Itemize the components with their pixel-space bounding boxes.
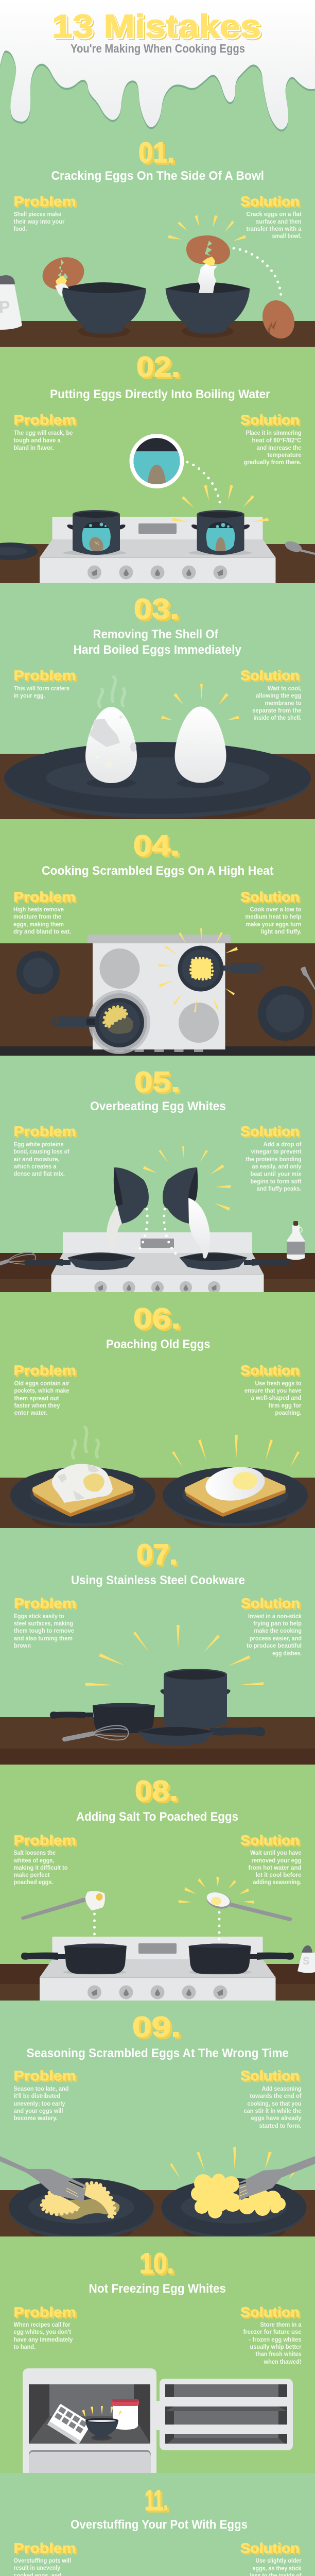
solution text: begins to form soft bbox=[250, 1178, 302, 1185]
solution label: Solution bbox=[240, 2540, 300, 2556]
panel: mistake 10 bbox=[0, 2236, 315, 2473]
solution text: make the cooking bbox=[254, 1627, 302, 1634]
fridge body bbox=[23, 2368, 160, 2473]
problem label: Problem bbox=[15, 1597, 78, 1613]
rays bbox=[143, 1146, 231, 1211]
title: 13 Mistakes bbox=[53, 9, 262, 46]
problem text: The egg will crack, be bbox=[13, 429, 73, 436]
problem text: them spread out bbox=[14, 1395, 59, 1402]
solution text: temperature bbox=[268, 451, 302, 459]
problem label: Problem bbox=[13, 2068, 76, 2083]
number 01: 01. bbox=[138, 136, 174, 168]
solution text: allowing the egg bbox=[256, 692, 302, 699]
panel: mistake 09 bbox=[0, 2001, 315, 2243]
fork right bbox=[239, 2156, 315, 2200]
dripping egg white shadow bbox=[0, 2, 315, 132]
solution text: usually whip better bbox=[250, 2343, 302, 2350]
solution text: to produce beautiful bbox=[247, 1642, 302, 1649]
dotted paths bbox=[136, 1209, 176, 1253]
dotted paths bbox=[95, 1912, 219, 1941]
solution label: Solution bbox=[242, 1834, 301, 1850]
pot right, simmering with whole egg bbox=[189, 510, 252, 555]
solution text: medium heat to help bbox=[245, 913, 302, 920]
problem text: bond, causing loss of bbox=[13, 1148, 69, 1155]
problem text: food. bbox=[13, 225, 27, 232]
salt shaker bbox=[297, 1945, 315, 1973]
number 08: 08. bbox=[135, 1774, 178, 1807]
number 11: 11. bbox=[145, 2484, 168, 2516]
jar bbox=[112, 2399, 139, 2430]
solution text bbox=[247, 1613, 302, 1657]
heading 06: Poaching Old Eggs bbox=[106, 1337, 210, 1351]
number 07: 07. bbox=[136, 1538, 178, 1570]
solution text bbox=[244, 1380, 302, 1416]
solution text: membrane to bbox=[265, 700, 302, 707]
problem text: egg whites, you don't bbox=[13, 2328, 71, 2335]
solution text: inside of the shell. bbox=[253, 714, 302, 721]
subtitle: You're Making When Cooking Eggs bbox=[71, 42, 245, 55]
good eggs bbox=[191, 2174, 286, 2218]
number 09: 09. bbox=[132, 2010, 181, 2043]
panel: header and mistake 01 bbox=[0, 0, 315, 347]
number 03: 03. bbox=[134, 592, 179, 625]
problem text: faster when they bbox=[14, 1402, 60, 1409]
problem text bbox=[13, 906, 71, 935]
counter from above bbox=[0, 943, 315, 1056]
solution text: frying pan to help bbox=[253, 1620, 302, 1627]
heading 11: Overstuffing Your Pot With Eggs bbox=[71, 2518, 248, 2532]
salt shaker: S bbox=[303, 1956, 309, 1967]
problem label: Problem bbox=[15, 1125, 77, 1141]
bowl right with clean crack bbox=[166, 235, 250, 338]
number 04: 04. bbox=[135, 831, 182, 863]
counter bbox=[0, 1717, 315, 1765]
solution text: Cook over a low to bbox=[250, 906, 302, 913]
plate left bbox=[9, 2178, 154, 2243]
number 11: 11. bbox=[147, 2486, 170, 2518]
pot left, boiling with cracked egg bbox=[63, 510, 126, 555]
solution text: Use slightly older bbox=[255, 2557, 302, 2564]
problem text bbox=[13, 2085, 69, 2122]
problem text: have any immediately bbox=[13, 2336, 73, 2343]
problem text: become watery. bbox=[13, 2114, 58, 2122]
rays bbox=[179, 1877, 254, 1904]
counter bbox=[0, 544, 315, 583]
steam bbox=[73, 1427, 98, 1458]
solution text: eggs, as they stick bbox=[252, 2565, 302, 2572]
solution text bbox=[245, 906, 302, 935]
solution text bbox=[246, 1141, 302, 1192]
problem text: making it difficult to bbox=[13, 1864, 68, 1871]
problem text: eggs, making them bbox=[13, 921, 64, 928]
problem text: make perfect bbox=[13, 1871, 50, 1878]
solution text: surface and then bbox=[256, 218, 302, 225]
heading 05: Overbeating Egg Whites bbox=[90, 1099, 226, 1113]
solution text: heat of 80°F/82°C bbox=[252, 437, 302, 444]
solution text: removed your egg bbox=[251, 1857, 302, 1864]
dotted path bbox=[234, 248, 281, 299]
vinegar bottle bbox=[287, 1221, 305, 1260]
solution text: Add seasoning bbox=[261, 2085, 302, 2092]
stove bbox=[40, 517, 276, 588]
problem text: air and moisture, bbox=[13, 1156, 60, 1163]
solution text: gradually from there. bbox=[244, 459, 302, 466]
saucepan bbox=[50, 1703, 155, 1733]
number 07: 07. bbox=[138, 1540, 180, 1572]
steam bbox=[99, 677, 125, 707]
heading 07: Using Stainless Steel Cookware bbox=[71, 1573, 245, 1587]
number 09: 09. bbox=[134, 2012, 183, 2045]
panel: mistake 05 bbox=[0, 1056, 315, 1295]
solution label: Solution bbox=[240, 1833, 300, 1848]
number 06: 06. bbox=[133, 1302, 181, 1334]
counter bbox=[0, 2190, 315, 2236]
problem text bbox=[14, 1380, 69, 1416]
stove bbox=[40, 1937, 276, 2008]
problem label: Problem bbox=[15, 669, 77, 685]
problem text: unevenly; too early bbox=[13, 2100, 65, 2107]
heading 03: Hard Boiled Eggs Immediately bbox=[73, 643, 242, 657]
solution text: light and fluffy. bbox=[261, 928, 302, 935]
whole cracked egg bbox=[257, 296, 300, 343]
number 03: 03. bbox=[136, 595, 181, 627]
solution text: and increase the bbox=[256, 444, 302, 451]
problem text: Overstuffing pots will bbox=[13, 2557, 71, 2564]
solution text: Crack eggs on a flat bbox=[246, 210, 302, 217]
egg with craters bbox=[85, 707, 137, 788]
solution text: eggs have already bbox=[251, 2114, 302, 2122]
problem label: Problem bbox=[15, 2306, 77, 2321]
solution text: from hot water and bbox=[248, 1864, 302, 1871]
problem label: Problem bbox=[13, 194, 76, 209]
problem text: their way into your bbox=[13, 218, 65, 225]
problem text bbox=[13, 685, 69, 699]
solution text: separate from the bbox=[252, 707, 302, 714]
solution text: make your eggs turn bbox=[246, 921, 302, 928]
solution label: Solution bbox=[240, 668, 300, 683]
heading 10: Not Freezing Egg Whites bbox=[89, 2282, 226, 2296]
number 10: 10. bbox=[139, 2247, 174, 2279]
heading 03: Removing The Shell Of bbox=[93, 628, 219, 641]
heading 09: Seasoning Scrambled Eggs At The Wrong Time bbox=[27, 2046, 289, 2060]
solution label: Solution bbox=[242, 1125, 301, 1141]
good pan bbox=[178, 946, 264, 991]
toast left bbox=[32, 1475, 134, 1517]
problem label: Problem bbox=[14, 1596, 76, 1611]
problem text: in your egg. bbox=[13, 692, 45, 699]
panel: mistake 04 bbox=[0, 819, 315, 1056]
problem label: Problem bbox=[13, 412, 76, 428]
rays bbox=[170, 2147, 295, 2179]
solution text: Place it in simmering bbox=[246, 429, 302, 436]
number 10: 10. bbox=[142, 2249, 176, 2281]
problem text: Egg white proteins bbox=[13, 1141, 64, 1148]
solution text: Add a drop of bbox=[264, 1141, 302, 1148]
solution label: Solution bbox=[240, 1363, 300, 1378]
panel: mistake 06 bbox=[0, 1292, 315, 1530]
solution text bbox=[246, 210, 302, 240]
fridge door bbox=[160, 2379, 293, 2450]
ice tray bbox=[47, 2404, 92, 2444]
solution text: towards the end of bbox=[250, 2092, 302, 2099]
solution text: a well-shaped and bbox=[251, 1394, 302, 1401]
number 02: 02. bbox=[136, 350, 180, 383]
fork bbox=[301, 967, 315, 990]
solution text: adding seasoning. bbox=[253, 1878, 302, 1886]
problem text: which creates a bbox=[13, 1163, 57, 1170]
bad poached egg bbox=[52, 1464, 113, 1503]
problem label: Problem bbox=[13, 1124, 76, 1139]
bowl of egg whites bbox=[85, 2418, 118, 2441]
solution text bbox=[244, 2085, 302, 2129]
solution text bbox=[250, 2557, 302, 2576]
smooth egg bbox=[175, 707, 226, 788]
number 01: 01. bbox=[141, 138, 177, 171]
panel: mistake 03 bbox=[0, 583, 315, 822]
problem text: pockets, which make bbox=[14, 1387, 69, 1394]
solution text: process easier, and bbox=[250, 1635, 302, 1642]
rays bbox=[85, 1625, 264, 1686]
stove from above bbox=[87, 935, 231, 1052]
solution text: small bowl. bbox=[272, 232, 302, 240]
panel: mistake 11 bbox=[0, 2473, 315, 2576]
problem text: enter water. bbox=[14, 1409, 47, 1416]
good poached egg bbox=[203, 1463, 267, 1504]
plate right bbox=[163, 1467, 308, 1530]
problem text: moisture from the bbox=[13, 913, 61, 920]
solution text: beat until your mix bbox=[250, 1171, 302, 1178]
burning pan with smoke bbox=[51, 990, 150, 1054]
solution label: Solution bbox=[240, 194, 300, 209]
solution text bbox=[252, 685, 302, 721]
solution text: transfer them with a bbox=[246, 225, 302, 232]
solution text bbox=[244, 429, 302, 466]
frying pan bbox=[138, 1726, 265, 1745]
solution label: Solution bbox=[242, 414, 301, 429]
stove bbox=[51, 1232, 264, 1295]
counter bbox=[0, 321, 315, 347]
pan left bbox=[24, 1252, 135, 1270]
problem label: Problem bbox=[15, 195, 77, 211]
solution text: when thawed! bbox=[264, 2358, 302, 2365]
problem label: Problem bbox=[13, 668, 76, 683]
counter bbox=[0, 754, 315, 819]
number 08: 08. bbox=[137, 1776, 180, 1809]
number 05: 05. bbox=[136, 1067, 182, 1100]
problem label: Problem bbox=[13, 2304, 76, 2320]
bowl left with bad crack bbox=[39, 252, 146, 338]
problem text bbox=[13, 1849, 67, 1886]
problem text: Salt loosens the bbox=[13, 1849, 56, 1856]
plate right bbox=[258, 986, 312, 1041]
title: 13 Mistakes bbox=[54, 10, 263, 47]
spoon with bad egg bbox=[21, 1891, 105, 1920]
solution text: can stir it in while the bbox=[244, 2107, 302, 2114]
saucepan right bbox=[188, 1943, 294, 1975]
problem text: Shell pieces make bbox=[13, 210, 61, 217]
problem label: Problem bbox=[15, 2070, 77, 2085]
number 06: 06. bbox=[135, 1304, 183, 1336]
solution text: - frozen egg whites bbox=[249, 2336, 302, 2343]
whisk bbox=[64, 1725, 129, 1743]
problem text: bland in flavor. bbox=[13, 444, 54, 451]
slotted spoon bbox=[284, 539, 315, 555]
solution text: let it cool before bbox=[255, 1871, 302, 1878]
plate left bbox=[16, 951, 60, 994]
problem text: and your eggs will bbox=[13, 2107, 63, 2114]
panel: mistake 02 bbox=[0, 347, 315, 588]
problem text bbox=[13, 2557, 71, 2576]
number 05: 05. bbox=[134, 1065, 180, 1098]
solution text: started to form. bbox=[259, 2122, 302, 2129]
solution text: freezer for future use bbox=[243, 2328, 302, 2335]
problem text: This will form craters bbox=[13, 685, 69, 692]
toast right bbox=[184, 1475, 286, 1517]
solution label: Solution bbox=[242, 195, 301, 211]
solution text: cooking, so that you bbox=[247, 2100, 302, 2107]
solution text: as easily, and only bbox=[252, 1163, 302, 1170]
problem text: and also turning them bbox=[14, 1635, 73, 1642]
number 02: 02. bbox=[138, 352, 182, 385]
panel: mistake 07 bbox=[0, 1528, 315, 1765]
problem text: them tough to remove bbox=[14, 1627, 74, 1634]
counter bbox=[0, 1964, 315, 2001]
solution label: Solution bbox=[242, 669, 301, 685]
problem text: to hand. bbox=[13, 2343, 36, 2350]
problem label: Problem bbox=[13, 1833, 76, 1848]
plate left bbox=[10, 1467, 155, 1530]
solution label: Solution bbox=[242, 891, 301, 906]
plate right bbox=[162, 2178, 306, 2243]
problem text: dense and flat mix. bbox=[13, 1170, 65, 1177]
spoon with good egg bbox=[205, 1890, 292, 1921]
heading 01: Cracking Eggs On The Side Of A Bowl bbox=[51, 169, 264, 183]
salt shaker bbox=[0, 275, 22, 330]
solution text: and fluffy peaks. bbox=[256, 1185, 302, 1192]
solution label: Solution bbox=[242, 1364, 301, 1380]
problem text bbox=[14, 1613, 74, 1649]
dripping egg white bbox=[0, 0, 315, 130]
solution label: Solution bbox=[240, 2068, 300, 2083]
pan right bbox=[179, 1252, 290, 1270]
rays bbox=[159, 928, 238, 1012]
solution text: Use fresh eggs to bbox=[255, 1380, 302, 1387]
solution label: Solution bbox=[242, 2306, 301, 2321]
solution text: poaching. bbox=[275, 1409, 302, 1416]
rays bbox=[82, 2406, 122, 2417]
problem text: it'll be distributed bbox=[13, 2092, 60, 2099]
solution text: Wait to cool, bbox=[268, 685, 302, 692]
counter bbox=[0, 1478, 315, 1528]
solution text: Invest in a non-stick bbox=[248, 1613, 302, 1620]
problem text bbox=[13, 2321, 73, 2350]
problem text: steel surfaces, making bbox=[14, 1620, 73, 1627]
plate on counter bbox=[0, 543, 38, 560]
problem text: poached eggs. bbox=[13, 1878, 54, 1886]
solution text: vinegar to prevent bbox=[251, 1148, 302, 1155]
solution text bbox=[248, 1849, 302, 1886]
solution label: Solution bbox=[242, 2070, 301, 2085]
problem text bbox=[13, 429, 73, 451]
solution label: Solution bbox=[240, 1124, 300, 1139]
rays bbox=[168, 215, 246, 241]
heading 04: Cooking Scrambled Eggs On A High Heat bbox=[42, 864, 274, 878]
rays bbox=[172, 485, 269, 522]
solution text: than fresh whites bbox=[255, 2350, 302, 2358]
large pot bbox=[160, 1669, 231, 1729]
problem label: Problem bbox=[13, 889, 76, 905]
heading 02: Putting Eggs Directly Into Boiling Water bbox=[50, 387, 270, 401]
problem text: whites of eggs, bbox=[13, 1857, 54, 1864]
solution text bbox=[243, 2321, 302, 2365]
dotted path bbox=[187, 462, 220, 506]
whisk bbox=[0, 1251, 37, 1271]
heading 08: Adding Salt To Poached Eggs bbox=[76, 1810, 238, 1824]
rays bbox=[161, 684, 239, 720]
problem text: tough and have a bbox=[13, 437, 61, 444]
problem text: result in unevenly bbox=[13, 2564, 60, 2571]
bowl left pouring thin whites bbox=[107, 1167, 149, 1248]
number 04: 04. bbox=[133, 829, 180, 861]
problem label: Problem bbox=[15, 1834, 77, 1850]
number 11 bbox=[145, 2484, 170, 2518]
solution label: Solution bbox=[242, 1597, 302, 1613]
problem text: When recipes call for bbox=[13, 2321, 71, 2328]
problem text bbox=[13, 210, 65, 232]
solution text: the proteins bonding bbox=[246, 1156, 302, 1163]
solution label: Solution bbox=[240, 889, 300, 905]
solution text: Store them in a bbox=[260, 2321, 302, 2328]
bowl right pouring fluffy whites bbox=[163, 1167, 210, 1259]
problem label: Problem bbox=[13, 2540, 76, 2556]
solution text: Wait until you have bbox=[250, 1849, 302, 1856]
rays bbox=[172, 1435, 300, 1467]
problem label: Problem bbox=[13, 1363, 76, 1378]
solution label: Solution bbox=[242, 2542, 301, 2557]
problem text: Season too late, and bbox=[13, 2085, 69, 2092]
problem label: Problem bbox=[15, 891, 77, 906]
solution label: Solution bbox=[240, 2304, 300, 2320]
problem label: Problem bbox=[15, 414, 77, 429]
saucepan left bbox=[21, 1943, 127, 1975]
solution label: Solution bbox=[241, 1596, 300, 1611]
magnified pot porthole bbox=[130, 434, 184, 488]
solution text: egg dishes. bbox=[272, 1650, 302, 1657]
problem text: dry and bland to eat. bbox=[13, 928, 71, 935]
solution text: ensure that you have bbox=[244, 1387, 302, 1394]
solution text: firm egg for bbox=[269, 1402, 302, 1409]
plate bbox=[4, 742, 311, 822]
fork left bbox=[0, 2156, 86, 2201]
panel: mistake 08 bbox=[0, 1765, 315, 2008]
problem text: brown bbox=[14, 1642, 31, 1649]
problem text: High heats remove bbox=[13, 906, 64, 913]
title: 13 Mistakes bbox=[52, 8, 261, 45]
heading 03 bbox=[73, 628, 242, 657]
solution label: Solution bbox=[240, 412, 300, 428]
problem text bbox=[13, 1141, 69, 1177]
problem label: Problem bbox=[15, 1364, 77, 1380]
counter bbox=[0, 1253, 315, 1292]
problem text: Old eggs contain air bbox=[14, 1380, 69, 1387]
problem label: Problem bbox=[15, 2542, 77, 2557]
watery eggs bbox=[40, 2181, 119, 2219]
problem text: Eggs stick easily to bbox=[14, 1613, 64, 1620]
